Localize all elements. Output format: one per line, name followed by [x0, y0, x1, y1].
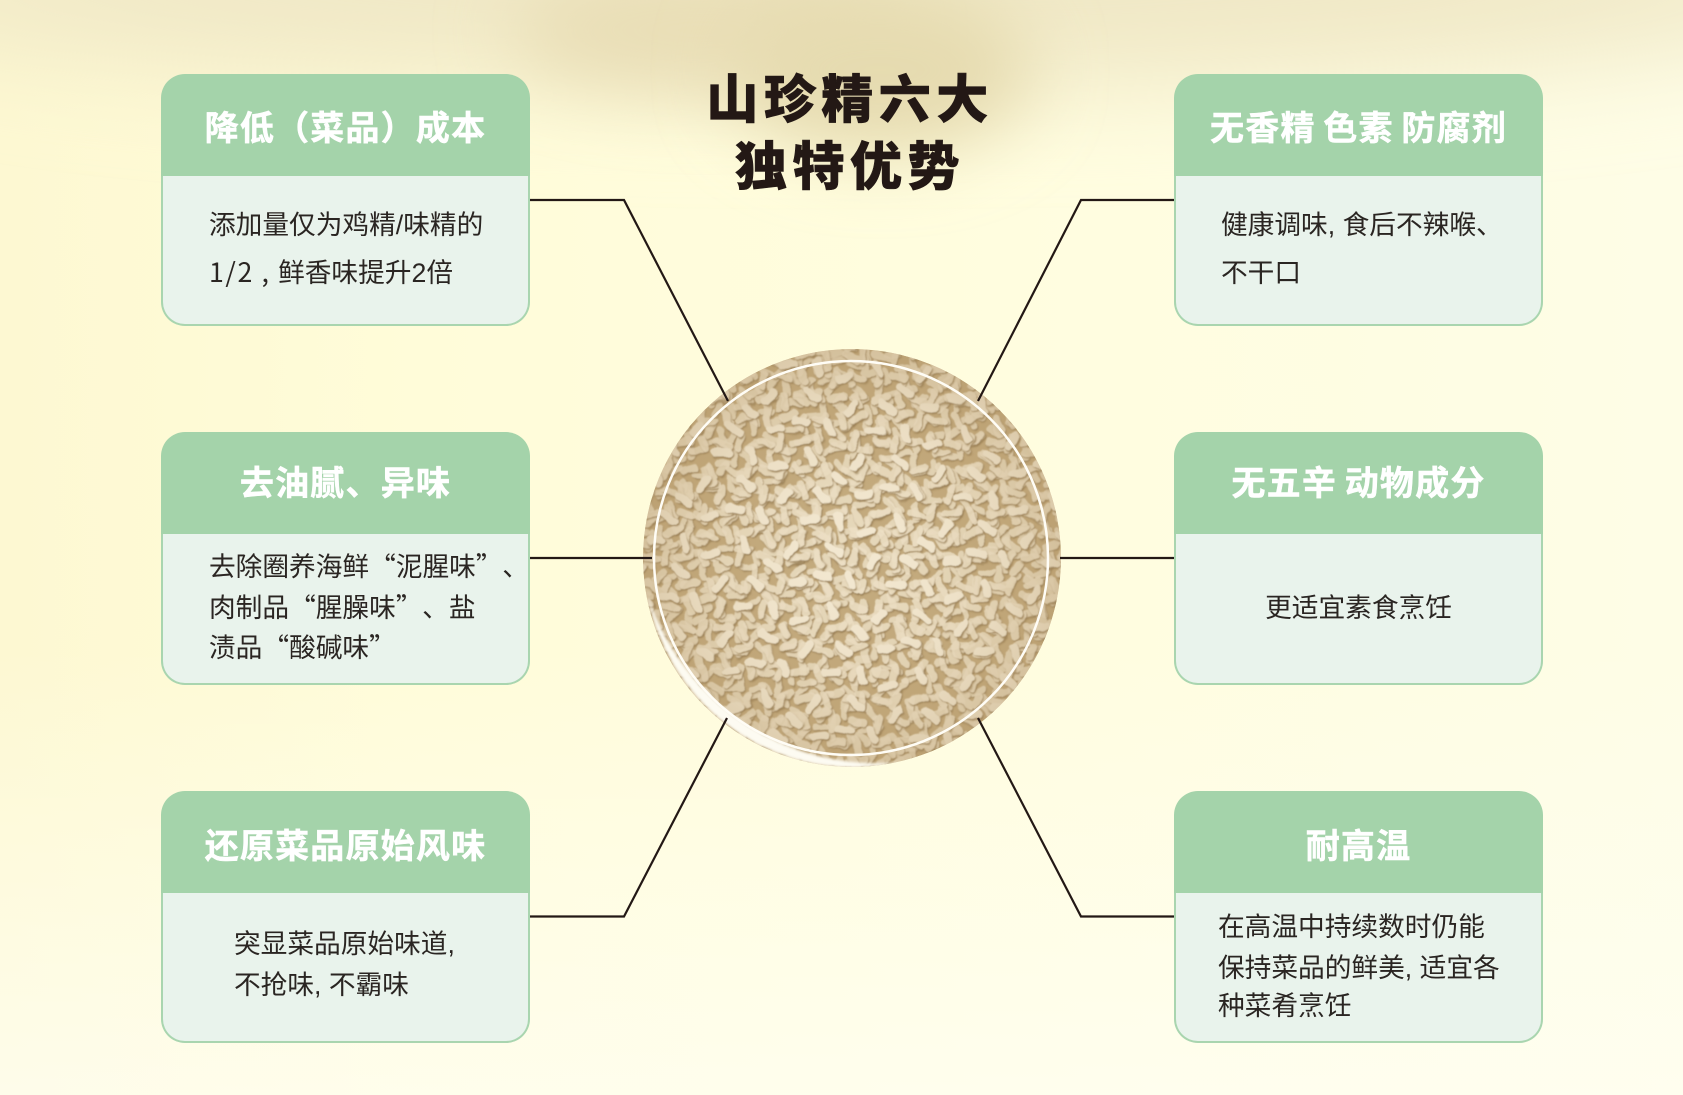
panel: restore original flavour [161, 791, 530, 1043]
panel: remove off-flavours [161, 432, 530, 685]
panel: heat resistant [1174, 791, 1543, 1043]
panel: no additives [1174, 74, 1543, 326]
panel: reduce cost [161, 74, 530, 326]
body text: 不抢味, 不霸味 [234, 970, 409, 1000]
granule disc [640, 346, 1064, 770]
title: 独特优势 [735, 139, 965, 197]
body text: 渍品“酸碱味” [209, 626, 396, 665]
body text: 保持菜品的鲜美, 适宜各 [1218, 953, 1500, 983]
body text: 种菜肴烹饪 [1218, 991, 1351, 1021]
body text: 去除圈养海鲜“泥腥味” 、 [209, 545, 529, 584]
panel: no pungent or animal ingredients [1174, 432, 1543, 685]
heading [161, 432, 530, 534]
body text [1174, 893, 1543, 1043]
white ring [654, 361, 1048, 755]
body text: 添加量仅为鸡精/味精的 [209, 210, 483, 240]
heading: 去油腻、异味 [240, 465, 451, 503]
heading [161, 74, 530, 176]
body text: 突显菜品原始味道, [234, 929, 455, 959]
body text: 在高温中持续数时仍能 [1218, 912, 1485, 942]
heading: 耐高温 [1306, 828, 1411, 866]
heading [1174, 791, 1543, 893]
body text [161, 176, 530, 326]
body text [161, 534, 530, 685]
heading [161, 791, 530, 893]
heading: 无五辛 动物成分 [1231, 465, 1486, 503]
heading: 无香精 色素 防腐剂 [1210, 110, 1507, 148]
body text [1174, 176, 1543, 326]
body text: 1/2 , 鲜香味提升2倍 [209, 251, 453, 290]
title: 山珍精六大 [706, 72, 994, 130]
heading [1174, 74, 1543, 176]
body text: 肉制品“腥臊味” 、盐 [209, 586, 476, 625]
body text: 不干口 [1221, 258, 1301, 288]
heading: 还原菜品原始风味 [205, 828, 486, 866]
title [706, 72, 994, 197]
body text [161, 893, 530, 1043]
body text: 健康调味, 食后不辣喉、 [1221, 210, 1503, 240]
body text [1174, 534, 1543, 685]
central photo of granules [643, 349, 1061, 767]
body text: 更适宜素食烹饪 [1265, 593, 1452, 623]
heading [1174, 432, 1543, 534]
heading: 降低（菜品）成本 [205, 110, 486, 148]
